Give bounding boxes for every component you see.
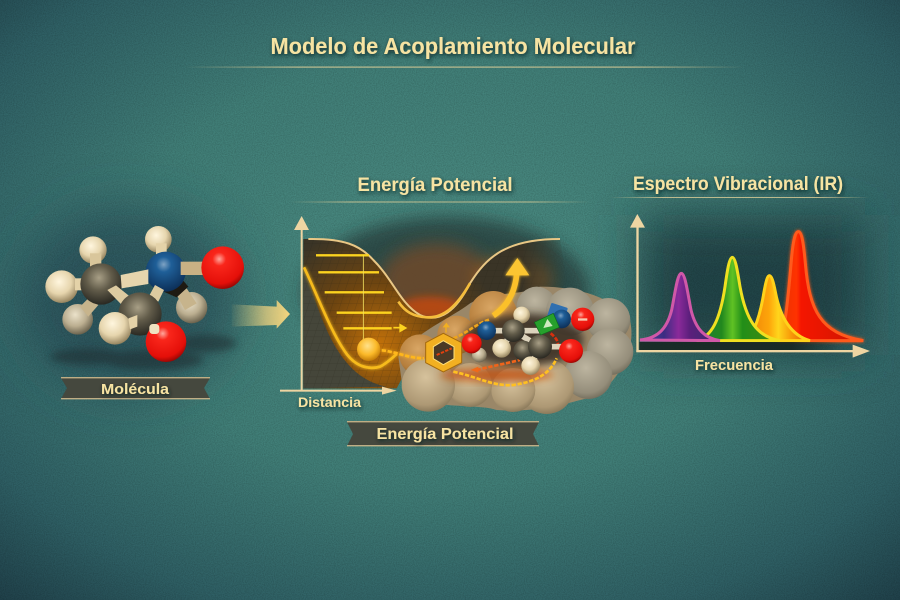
banner: Molécula: [61, 377, 210, 399]
molecule carbon left: [80, 263, 122, 305]
baseline band: [639, 342, 843, 350]
dashed binding paths: [382, 319, 558, 385]
molecule oxygens: [146, 246, 244, 362]
peak: red: [780, 232, 863, 341]
arrow: molecule to energy: [232, 300, 290, 329]
energy levels: [316, 255, 407, 340]
molecule shadow: [50, 335, 237, 370]
icon: gold ball: [357, 338, 380, 361]
energy surface: [303, 239, 567, 388]
label: Frecuencia: Frecuencia: [695, 357, 774, 374]
axes: [630, 214, 870, 358]
peak: yellow: [747, 276, 810, 341]
heading: energía potencial: Energía Potencial: [358, 175, 512, 196]
panel: potential energy: [280, 216, 633, 414]
axes: [280, 216, 397, 395]
cloud: binding pocket: [398, 287, 633, 414]
panel: molecule: [45, 226, 290, 370]
label: Distancia: Distancia: [298, 394, 361, 410]
heading: espectro: Espectro Vibracional (IR): [633, 174, 843, 195]
orange haze: [380, 243, 550, 320]
dark halo: [303, 217, 590, 370]
banner: Energía Potencial: [347, 421, 539, 446]
peak: purple: [640, 273, 720, 341]
peak: green: [697, 257, 780, 341]
banner: Molécula: Molécula: [101, 381, 170, 398]
title: Modelo de Acoplamiento Molecular: [270, 33, 636, 59]
energy curves: [304, 239, 560, 368]
molecule bonds: [107, 269, 164, 310]
molecule hydrogen front: [99, 312, 137, 345]
molecule nitrogen group: [145, 226, 188, 297]
chart: IR spectrum: [630, 214, 870, 358]
banner: Energía Potencial: Energía Potencial: [376, 426, 514, 443]
molecule carbon centre: [118, 292, 162, 336]
icon: hexagon ring: [426, 323, 462, 372]
molecule back atoms: [45, 236, 207, 335]
docked molecule: [462, 303, 594, 375]
big arrow: [493, 258, 529, 316]
